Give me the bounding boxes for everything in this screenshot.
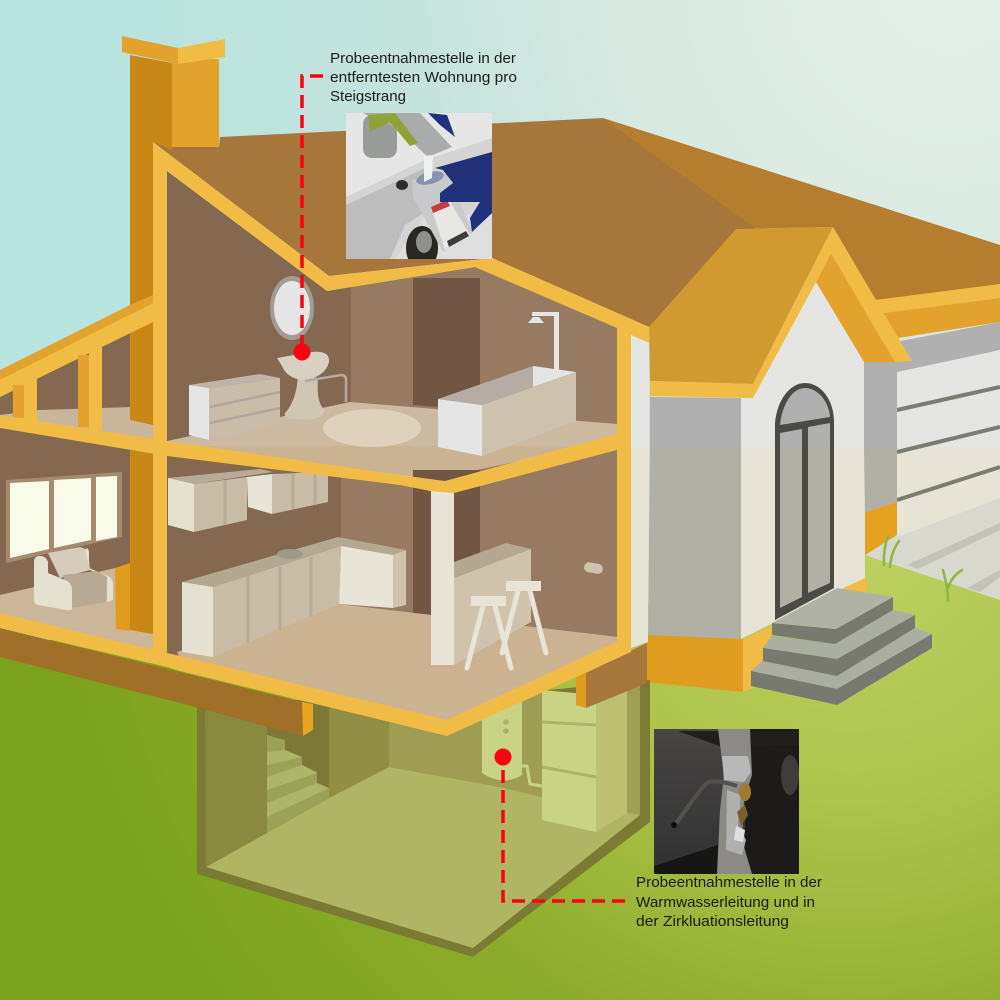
bathroom back wall [351,267,618,426]
rug [323,409,421,447]
lower ledge [654,845,718,874]
brass valve [739,783,751,801]
drain [406,226,438,259]
pipe highlight [734,826,745,842]
attic posts [13,345,102,430]
right basement wall [596,680,640,832]
lower kitchen room [167,440,618,722]
sample bottle [412,170,473,252]
driveway [865,498,1000,600]
lower cabinets [182,537,406,657]
left rafter band [0,295,153,380]
left living room [0,420,153,655]
bar stools [467,581,546,668]
dresser [189,374,280,440]
garage roof trim [875,284,1000,338]
label upper sampling point: entferntesten Wohnung pro [330,70,517,86]
house end wall [631,335,649,648]
wash basin [277,352,346,420]
hot water boiler [482,700,522,781]
lower pipe [726,790,746,855]
boiler pipe [515,766,542,786]
underside band right [586,643,647,708]
entrance steps [751,588,932,705]
wall socket [583,562,604,575]
lawn [0,555,1000,1000]
ground floor beam [0,613,631,736]
storage cabinet [542,690,627,832]
main roof [153,118,1000,327]
bathtub [438,366,576,456]
window [6,472,122,563]
photo: sampling valve on pipe [654,729,799,874]
faucet spout [363,113,452,157]
photo: sampling at tap [346,113,492,270]
left rafter [0,303,153,397]
label red band [431,202,450,213]
bathroom floor [167,402,617,446]
back basement wall [389,690,542,797]
dashed leader upper [302,76,323,350]
bathroom side wall [167,171,351,442]
garage soffit [864,322,1000,372]
sampling point lower [494,748,632,901]
basement floor [206,767,640,948]
sky background [0,0,1000,700]
sink front [346,138,492,259]
basement shell [197,680,650,957]
insulated pipe [717,729,752,874]
wall mirror [270,276,314,340]
kitchen back wall [341,440,618,640]
underside band left [0,628,302,736]
bottle opening [416,171,444,185]
tube opening [671,822,677,828]
stair recess [267,700,329,833]
porch gable wall [741,282,865,639]
house timber frame [0,142,649,736]
gold gable trim [650,227,912,398]
left floor beam [0,415,617,493]
garage door [897,350,1000,537]
label lower sampling point: Probeentnahmestelle in der [636,875,822,891]
faucet reflection [368,113,418,146]
dashed leader lower [503,770,632,901]
porch side wall [648,397,741,639]
porch foundation [647,578,867,692]
grass tufts [884,536,962,601]
left attic room [0,310,153,440]
white column [431,490,454,665]
chimney [122,36,225,430]
bottle label [431,200,470,250]
orange gable infill [816,253,895,362]
red marker lower [494,748,512,766]
grey blob right [781,755,799,795]
bathroom floor front [167,434,617,481]
kitchen island [454,543,531,665]
dark doorway [413,278,480,410]
living room floor [0,568,153,655]
label upper sampling point: Probeentnahmestelle in der [330,51,516,67]
dark background right [745,729,799,874]
red marker upper [294,344,310,360]
faucet base [363,115,397,158]
overflow hole [396,180,408,190]
right side wall [864,362,897,555]
label lower sampling point: Warmwasserleitung und in [636,895,815,911]
basement [197,680,650,957]
basement stairs [267,735,329,833]
underside end cap [302,702,313,736]
mid basement wall [329,704,389,798]
sink bowl [346,168,424,259]
label upper sampling point: Steigstrang [330,89,406,105]
kitchen side wall [167,450,341,660]
porch [647,227,962,705]
kitchen floor [177,604,618,722]
underside end cap right [576,673,586,708]
brass fitting [737,805,748,826]
drain inner [416,231,432,253]
lower bowl [395,215,492,259]
sampling point upper [294,76,323,360]
main roof frame [153,142,649,653]
door [775,383,834,620]
pipe band [722,756,751,782]
upper bathroom [167,171,618,481]
chimney breast [115,450,153,634]
left basement wall [205,705,267,867]
shower head [528,312,559,372]
garage wing [864,322,1000,600]
dark door lower [413,470,480,622]
armchair [34,547,113,610]
upper cabinets [168,469,328,532]
living room wall [0,420,153,620]
water stream [424,155,433,182]
glove upper [428,113,455,137]
porch roof [649,227,833,384]
label lower sampling point: der Zirkluationsleitung [636,914,789,930]
upper dark corner [678,731,720,746]
sampling tube [675,782,737,825]
label barcode [447,231,469,247]
glove hand [435,152,492,232]
